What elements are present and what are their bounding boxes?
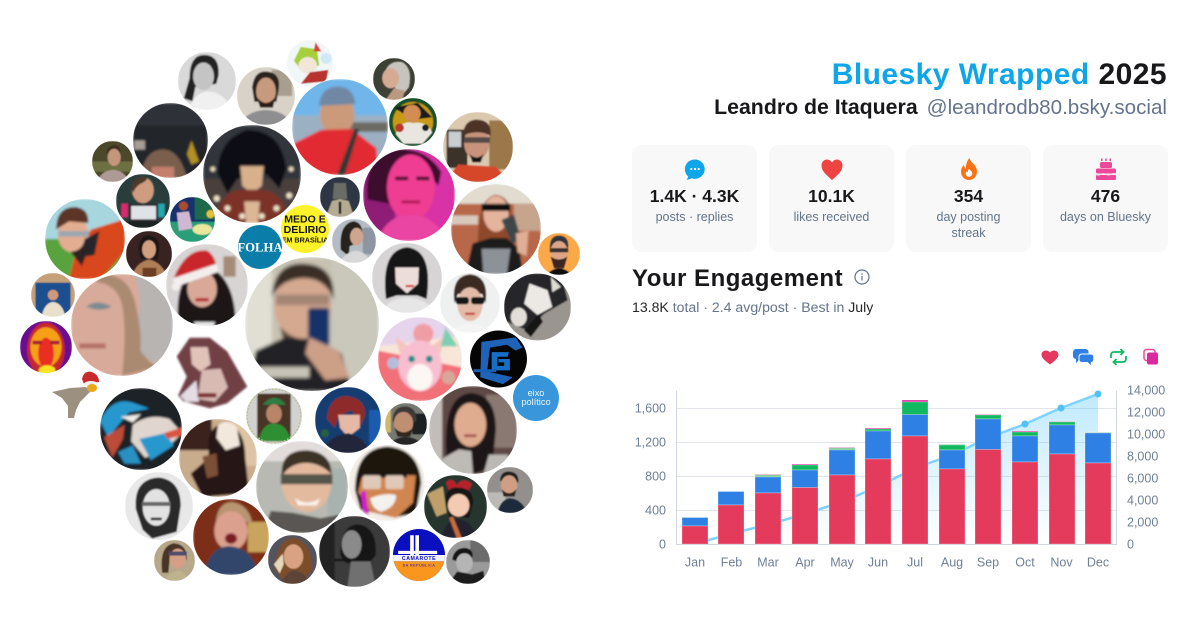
- stat card: posts and replies: [632, 145, 757, 252]
- right axis labels: 8,000: [1127, 450, 1158, 464]
- chart legend icons: [1042, 348, 1158, 366]
- month axis labels: Nov: [1050, 556, 1073, 570]
- avatar: woman with glasses lying down: [332, 219, 376, 263]
- left axis labels: 1,600: [635, 402, 666, 416]
- month axis labels: Jan: [685, 556, 705, 570]
- avatar: Medo e Delirio yellow logo: EM BRASÍLIA: [282, 235, 328, 244]
- cumulative line: [695, 390, 1102, 544]
- avatar: Medo e Delirio yellow logo: [281, 205, 329, 253]
- value: days on Bluesky: 476: [1091, 186, 1120, 206]
- avatar: Kiki with red bow: [424, 475, 487, 538]
- avatar: black and white cat: [504, 274, 571, 340]
- left axis labels: 800: [645, 470, 666, 484]
- avatar: thermal camera face: [20, 321, 72, 373]
- avatar: man in cap by the sea: [292, 79, 388, 175]
- section heading: Your Engagement: Your Engagement: [632, 265, 843, 292]
- icon: speech bubble: [684, 160, 705, 180]
- icon: heart: [822, 160, 842, 180]
- avatar: woman in magenta light: [363, 149, 455, 241]
- avatar: bearded man with curly hair: [237, 67, 295, 125]
- stat card: likes received: [769, 145, 894, 252]
- value: likes received: 10.1K: [808, 186, 855, 206]
- avatar: boxer badge: [389, 98, 437, 146]
- avatar: anime boy with red hair: [315, 387, 381, 453]
- avatar: screaming blond baby: [193, 499, 269, 575]
- icon: birthday cake: [1096, 158, 1116, 180]
- icon: flame: [961, 158, 977, 180]
- avatar: woman with hidden face smoking: [179, 419, 257, 497]
- avatar: Eixo Politico logo: político: [521, 397, 551, 407]
- month axis labels: Mar: [757, 556, 779, 570]
- icon: repost: [1111, 349, 1126, 365]
- avatar: painted woman portrait: [126, 231, 172, 277]
- avatar: monochrome woman in dark room: [319, 516, 390, 587]
- label: days on Bluesky: days on Bluesky: [1060, 210, 1151, 224]
- right axis labels: 12,000: [1127, 406, 1165, 420]
- right axis labels: 0: [1127, 538, 1134, 552]
- label: day posting streak: [937, 210, 1000, 240]
- bar: Jan: [682, 518, 708, 544]
- bar: May: [829, 447, 855, 544]
- right axis labels: 6,000: [1127, 472, 1158, 486]
- avatar bubble cluster: [20, 40, 580, 587]
- label: posts and replies: posts · replies: [656, 210, 733, 224]
- left axis labels: [635, 402, 666, 552]
- avatar: woman painting with drums: [170, 197, 215, 242]
- avatar: Camarote da Republica logo: CAMAROTE: [402, 556, 436, 562]
- value: posts and replies: 1.4K · 4.3K: [650, 186, 739, 206]
- month axis labels: May: [830, 556, 855, 570]
- bar: Nov: [1049, 421, 1075, 544]
- month axis labels: Apr: [795, 556, 815, 570]
- avatar: dinosaur in santa hat: [52, 372, 99, 418]
- avatar: black and white woman: [178, 52, 236, 110]
- avatar: blue and red lion illustration: [100, 388, 182, 470]
- value: day posting streak: 354: [954, 186, 983, 206]
- bar: Mar: [755, 474, 781, 544]
- left axis labels: 400: [645, 504, 666, 518]
- bar: Dec: [1085, 432, 1111, 544]
- icon: heart likes: [1042, 350, 1058, 364]
- month axis labels: Aug: [941, 556, 963, 570]
- avatar: Folha logo: FOLHA: [237, 240, 283, 254]
- avatar: Camarote da Republica logo: DA REPÚBLICA: [403, 562, 435, 567]
- engagement chart: [635, 384, 1165, 570]
- avatar: silver haired woman: [373, 58, 415, 100]
- bar: Apr: [792, 464, 818, 544]
- engagement summary text: 13.8K total · 2.4 avg/post · Best in July: [632, 299, 873, 315]
- avatar: woman with highlighted hair: [268, 535, 317, 584]
- avatar: man with beard in office: [385, 403, 427, 445]
- month axis labels: Dec: [1087, 556, 1109, 570]
- avatar: black and white woman with glasses: [125, 472, 193, 540]
- avatar: woman with energy drink by brick wall: [451, 184, 541, 274]
- avatar: woman with santa hat: [166, 244, 248, 326]
- avatar: cartoon man in orange jacket: [45, 199, 125, 279]
- label: day posting streak: streak: [951, 226, 986, 240]
- avatar: woman with long dark hair: [429, 386, 517, 474]
- left axis labels: 1,200: [635, 436, 666, 450]
- avatar: cartoon man with big grin: [349, 445, 425, 521]
- month axis labels: Sep: [977, 556, 999, 570]
- bar: Jun: [865, 428, 891, 544]
- avatar: man with a blue wall background: [31, 273, 75, 317]
- bar: Jul: [902, 400, 928, 544]
- right axis labels: 2,000: [1127, 516, 1158, 530]
- avatar: small woman with glasses: [154, 540, 195, 581]
- avatar: G logo: [470, 330, 527, 388]
- avatar: smiling man with glasses: [256, 441, 348, 533]
- label: likes received: likes received: [794, 210, 869, 224]
- avatar: smiling bearded man grey background: [487, 467, 533, 513]
- right axis labels: 10,000: [1127, 428, 1165, 442]
- month axis labels: Feb: [721, 556, 742, 570]
- avatar: man holding a tablet: [116, 174, 170, 228]
- avatar: cartoon character with green hair: [287, 40, 333, 86]
- avatar: dark room with guitars: [133, 103, 208, 178]
- icon: info: [854, 269, 870, 285]
- bar: Oct: [1012, 431, 1038, 544]
- month axis labels: Oct: [1015, 556, 1035, 570]
- avatar: monochrome man looking up: [446, 540, 490, 584]
- label: day posting streak: day posting: [937, 210, 1000, 224]
- avatar: figure in grey suit: [320, 177, 360, 217]
- avatar: Camarote da Republica logo: [393, 529, 445, 581]
- bar: Aug: [939, 444, 965, 544]
- icon: chat replies: [1073, 349, 1093, 365]
- avatar: man with glasses and patterned shirt: [92, 141, 133, 182]
- stat card: days on Bluesky: [1043, 145, 1168, 252]
- avatar: drawing of a girl with black hair: [372, 243, 442, 313]
- cumulative area fill: [695, 394, 1098, 544]
- avatar: pink Wigglytuff illustration: [378, 317, 462, 401]
- avatar: anime woman with brown hair: [176, 336, 248, 410]
- avatar: Eixo Politico logo: [513, 375, 559, 421]
- avatar: Eixo Politico logo: eixo: [528, 388, 544, 398]
- left axis labels: 0: [659, 538, 666, 552]
- right axis labels: 4,000: [1127, 494, 1158, 508]
- avatar: man in red shirt with glasses: [443, 112, 513, 182]
- right axis labels: [1127, 384, 1165, 552]
- avatar: woman with long blond hair close up: [71, 274, 173, 376]
- right axis labels: 14,000: [1127, 384, 1165, 398]
- avatar: anime character with black hair: [203, 125, 301, 223]
- bar: Feb: [718, 492, 744, 544]
- avatar: Folha logo: [238, 225, 282, 269]
- avatar: Medo e Delirio yellow logo: DELIRIO: [284, 224, 326, 236]
- month axis labels: Jul: [907, 556, 923, 570]
- avatar: Medo e Delirio yellow logo: MEDO E: [284, 213, 326, 225]
- avatar: man with glasses taking mirror selfie: [245, 257, 379, 391]
- avatar: woman in sunglasses: [440, 273, 500, 332]
- title: Bluesky Wrapped 2025: [832, 58, 1167, 91]
- month axis labels: [685, 556, 1109, 570]
- subtitle: name and handle: Leandro de Itaquera @leandrodb80.bsky.social: [714, 95, 1167, 119]
- bar: Sep: [975, 414, 1001, 544]
- month axis labels: Jun: [868, 556, 888, 570]
- avatar: man with beard on orange background: [538, 233, 580, 275]
- avatar: woman with christmas frame: [246, 388, 302, 444]
- stat card: day posting streak: [906, 145, 1031, 252]
- icon: quote squares: [1144, 350, 1158, 364]
